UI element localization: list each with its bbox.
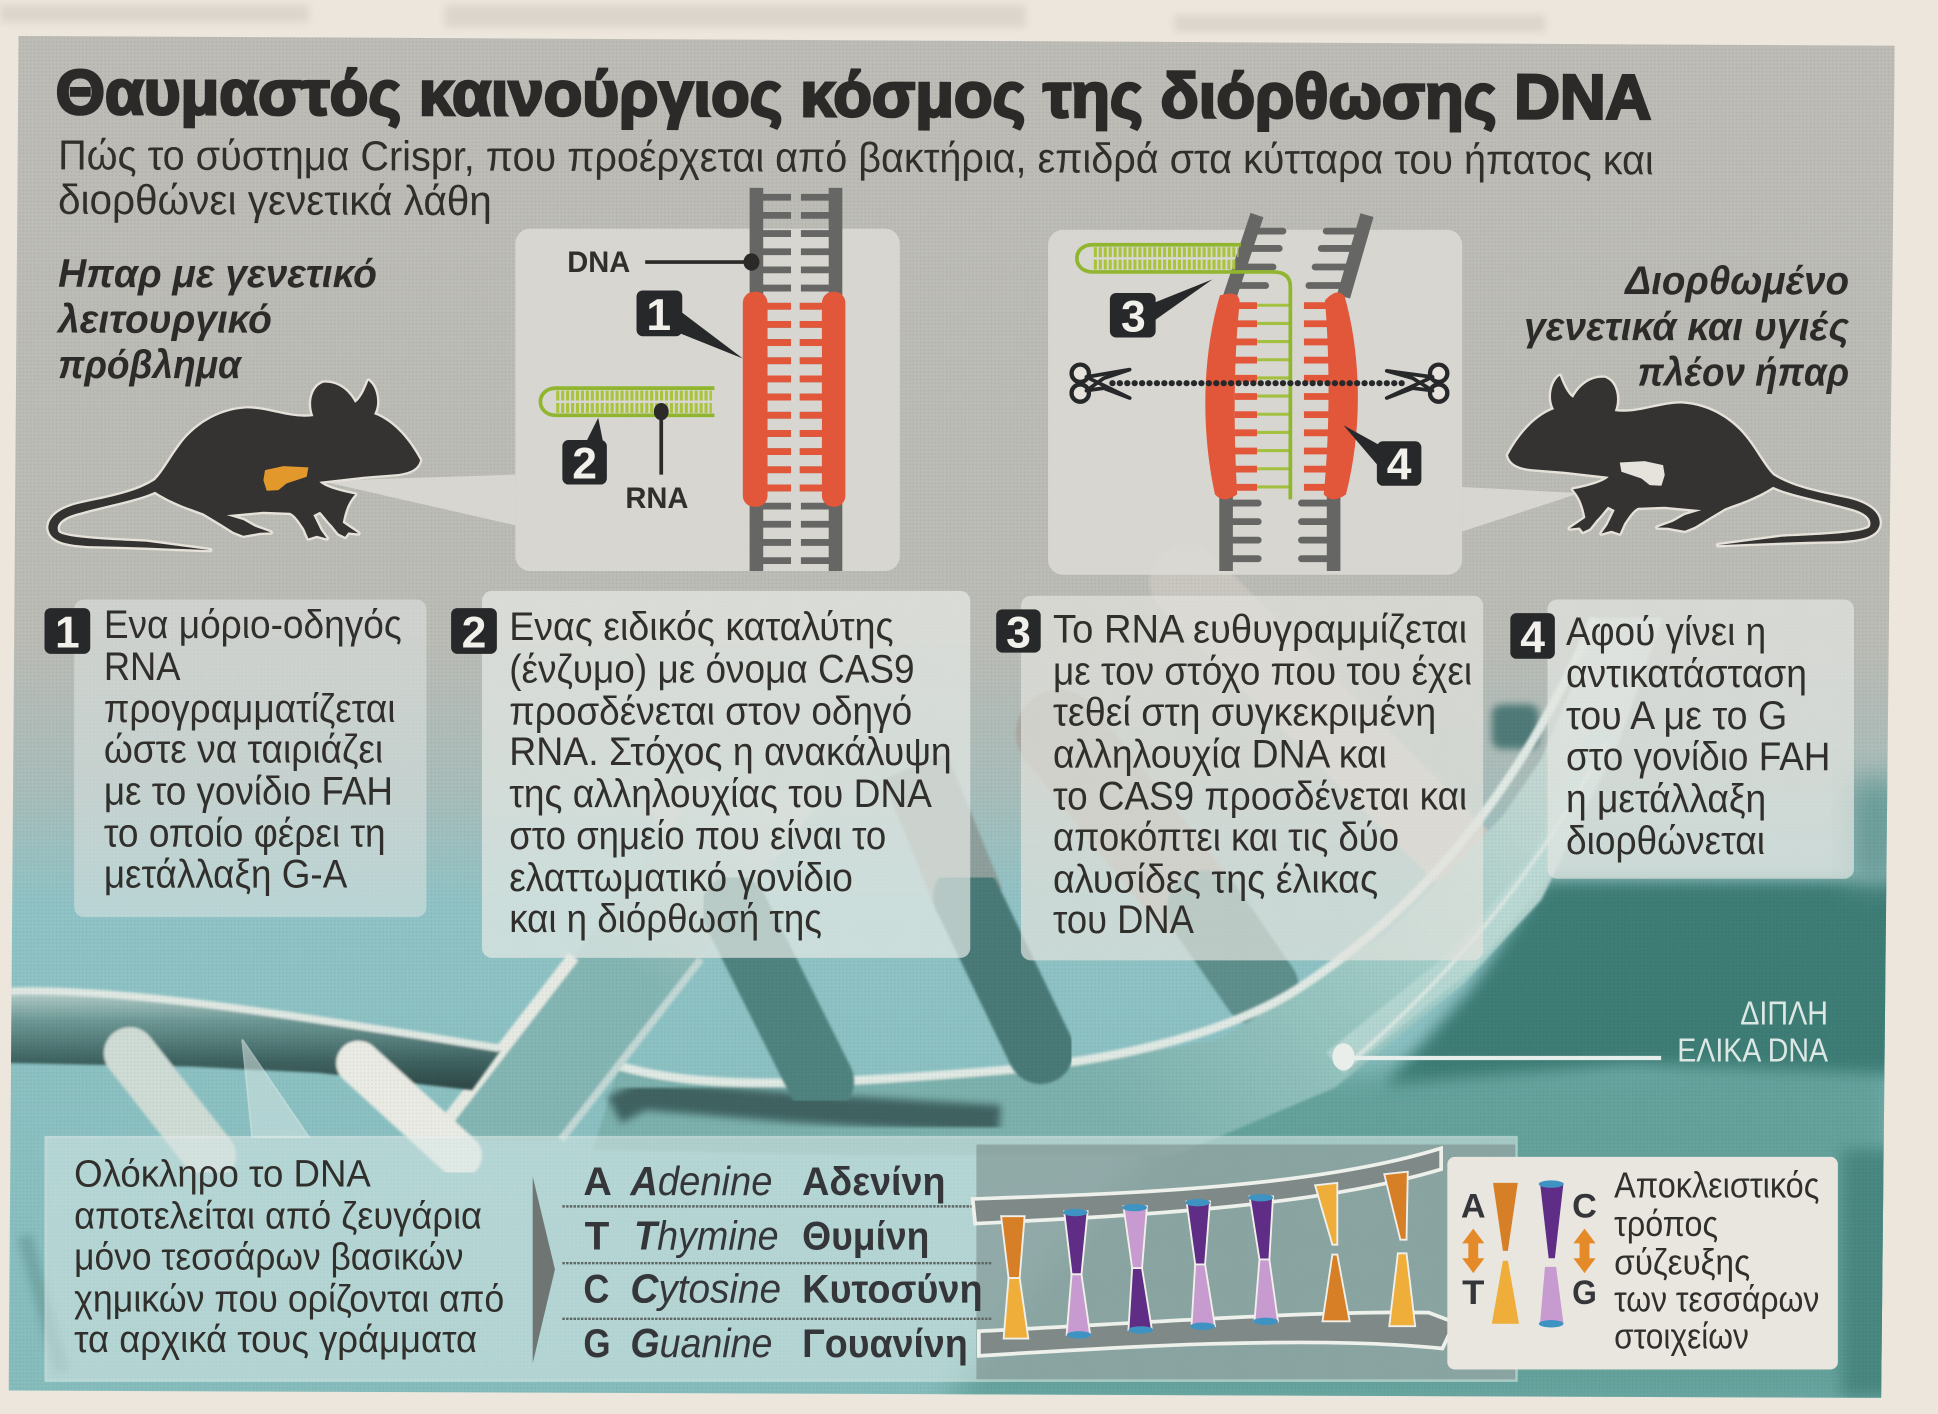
- step 2 text: της αλληλουχίας του DNA: [509, 772, 933, 816]
- pair A-T: [1461, 1183, 1519, 1324]
- row T: T: [585, 1215, 609, 1259]
- step 1 text: RNA: [104, 645, 181, 689]
- badge 4: 4: [1387, 441, 1412, 490]
- rods behind ribbon: [677, 581, 1458, 989]
- label: corrected healthy liver: γενετικά και υγιές: [1524, 305, 1849, 349]
- label: corrected healthy liver: Διορθωμένο: [1623, 259, 1849, 303]
- text: whole DNA explanation: [74, 1153, 504, 1361]
- callout: double helix: ΔΙΠΛΗ: [1740, 996, 1828, 1033]
- icon: mouse with defective liver: [48, 381, 420, 550]
- step 4: [1510, 610, 1830, 863]
- pointer: right mouse to inset: [1462, 487, 1580, 531]
- table: four bases: [562, 1158, 991, 1366]
- badge 2 small: 2: [462, 609, 486, 658]
- subtitle: [58, 131, 1654, 228]
- pair C-G: C: [1572, 1187, 1597, 1225]
- rod C: [444, 838, 720, 1142]
- step 4 text: του Α με το G: [1566, 694, 1787, 738]
- legend text: των τεσσάρων: [1614, 1279, 1819, 1319]
- step 3 text: αλληλουχία DNA και: [1053, 733, 1387, 777]
- row T: [585, 1213, 929, 1259]
- panel: bottom: [46, 1137, 1517, 1381]
- cut line with scissors: [1072, 365, 1447, 402]
- step 1 text: το οποίο φέρει τη: [104, 812, 386, 856]
- diagram: cut DNA helix with guide: [1077, 215, 1367, 571]
- step 3 text: [1053, 608, 1472, 942]
- step 1: [44, 603, 402, 896]
- step 2 text: και η διόρθωσή της: [509, 897, 822, 941]
- subtitle: διορθώνει γενετικά λάθη: [58, 176, 492, 224]
- panel: step 1 box: [74, 599, 426, 917]
- pair A-T: A: [1461, 1187, 1486, 1225]
- callout: double helix: ΕΛΙΚΑ DNA: [1677, 1033, 1829, 1070]
- base caps: [1063, 1194, 1278, 1339]
- title: Θαυμαστός καινούργιος κόσμος της διόρθωσης DNA: [56, 58, 1651, 133]
- icon: mouse with corrected liver: [1508, 376, 1880, 545]
- row G: Γουανίνη: [802, 1322, 968, 1366]
- badge 2 small: [451, 608, 497, 658]
- panel: step 2 box: [482, 591, 970, 958]
- row A: Adenine: [629, 1158, 772, 1204]
- pair A-T: T: [1462, 1274, 1484, 1312]
- step 2 text: ελαττωματικό γονίδιο: [509, 856, 853, 900]
- step 2 text: (ένζυμο) με όνομα CAS9: [509, 647, 915, 691]
- badge 1: [637, 290, 743, 358]
- step 4 text: στο γονίδιο FAH: [1566, 735, 1830, 779]
- base pairs: [1001, 1172, 1415, 1339]
- legend text: Αποκλειστικός: [1614, 1166, 1819, 1206]
- icon: orange liver: [263, 466, 308, 491]
- panel: inset left: [515, 229, 900, 571]
- row G: [583, 1320, 968, 1366]
- badge 4 small: [1510, 613, 1555, 663]
- step 3 text: με τον στόχο που του έχει: [1053, 650, 1472, 694]
- step 3 text: αποκόπτει και τις δύο: [1053, 815, 1399, 859]
- pair C-G: G: [1572, 1274, 1597, 1312]
- badge 2: 2: [572, 439, 597, 488]
- guide hairpin and strand: [1077, 245, 1290, 499]
- step 3: [996, 608, 1472, 942]
- badge 4 small: 4: [1520, 614, 1545, 663]
- badge 3: 3: [1121, 292, 1146, 341]
- legend text: στοιχείων: [1614, 1316, 1749, 1356]
- label: liver with functional genetic problem: πρόβλημα: [58, 343, 242, 387]
- step 3 text: Το RNA ευθυγραμμίζεται: [1053, 608, 1467, 652]
- badge 1: 1: [646, 291, 671, 340]
- icon: right scissors: [1387, 365, 1447, 402]
- subtitle: Πώς το σύστημα Crispr, που προέρχεται από βακτήρια, επιδρά στα κύτταρα του ήπατος και: [58, 131, 1654, 183]
- text: whole DNA explanation: Ολόκληρο το DNA: [74, 1153, 371, 1196]
- row T: Θυμίνη: [802, 1215, 929, 1259]
- badge 4: [1343, 425, 1421, 490]
- text: whole DNA explanation: μόνο τεσσάρων βασικών: [74, 1235, 463, 1278]
- label: corrected healthy liver: πλέον ήπαρ: [1638, 351, 1849, 395]
- top strand: [973, 1148, 1441, 1224]
- rungs: [1226, 231, 1362, 559]
- row G: Guanine: [630, 1320, 772, 1366]
- step 3 text: του DNA: [1053, 898, 1195, 942]
- step 1 text: ώστε να ταιριάζει: [104, 728, 383, 772]
- step 4 text: [1566, 610, 1830, 863]
- panel: pairing legend: [1447, 1157, 1838, 1369]
- badge 3 small: 3: [1006, 609, 1031, 658]
- row A: Αδενίνη: [802, 1160, 946, 1204]
- row C: Cytosine: [630, 1266, 781, 1312]
- badge 3: [1110, 279, 1212, 341]
- badge 3 small: [996, 609, 1041, 658]
- step 4 text: διορθώνεται: [1566, 819, 1765, 863]
- text: whole DNA explanation: τα αρχικά τους γράμματα: [74, 1318, 477, 1361]
- step 2 text: προσδένεται στον οδηγό: [509, 689, 912, 733]
- step 1 text: μετάλλαξη G-A: [104, 852, 348, 896]
- step 1 text: με το γονίδιο FAH: [104, 770, 393, 814]
- row C: [583, 1266, 983, 1312]
- text: whole DNA explanation: χημικών που ορίζονται από: [74, 1277, 504, 1320]
- left ribbon: [6, 990, 501, 1156]
- step 4 text: Αφού γίνει η: [1566, 610, 1766, 654]
- legend text: τρόπος: [1614, 1204, 1718, 1244]
- step 3 text: το CAS9 προσδένεται και: [1053, 775, 1467, 819]
- green rungs: [1257, 304, 1287, 489]
- step 3 text: αλυσίδες της έλικας: [1053, 857, 1378, 901]
- step 1 text: [104, 603, 402, 896]
- dark teal right area: [1384, 880, 1928, 1085]
- diagram: DNA helix with highlighted target: [743, 188, 845, 571]
- bottom strand: [979, 1312, 1455, 1356]
- label: liver with functional genetic problem: Ηπαρ με γενετικό: [58, 252, 377, 296]
- badge 1 small: [44, 608, 90, 658]
- row C: Κυτοσύνη: [802, 1268, 983, 1312]
- step 2 text: στο σημείο που είναι το: [509, 814, 886, 858]
- big ribbon: [593, 618, 1662, 1156]
- row A: A: [583, 1160, 612, 1204]
- step 1 text: προγραμματίζεται: [104, 687, 396, 731]
- step 2 text: [509, 605, 952, 941]
- icon: healed liver: [1620, 461, 1665, 486]
- label: DNA: [567, 246, 760, 279]
- ladder backdrop: [976, 1145, 1515, 1379]
- label: DNA: DNA: [567, 246, 630, 279]
- row T: Thymine: [634, 1213, 779, 1259]
- pair C-G: [1539, 1180, 1597, 1327]
- row G: G: [583, 1322, 611, 1366]
- step 4 text: η μετάλλαξη: [1566, 777, 1766, 821]
- panel: step 3 box: [1021, 596, 1483, 960]
- step 3 text: τεθεί στη συγκεκριμένη: [1053, 691, 1436, 735]
- lower right teal: [939, 1051, 1897, 1409]
- text: whole DNA explanation: αποτελείται από ζευγάρια: [74, 1195, 482, 1238]
- step 2: [451, 605, 952, 941]
- label: liver with functional genetic problem: λειτουργικό: [56, 298, 272, 342]
- label: liver with functional genetic problem: [56, 252, 377, 387]
- row A: [583, 1158, 946, 1204]
- callout: double helix: [1332, 996, 1829, 1070]
- strands: [1226, 215, 1257, 571]
- step 1 text: Ενα μόριο-οδηγός: [104, 603, 402, 647]
- target section: [743, 292, 845, 507]
- label: RNA: RNA: [625, 482, 688, 515]
- step 4 text: αντικατάσταση: [1566, 652, 1807, 696]
- step 2 text: RNA. Στόχος η ανακάλυψη: [509, 730, 952, 774]
- row C: C: [583, 1268, 609, 1312]
- label: RNA: [625, 403, 688, 515]
- pointer: left mouse to inset: [320, 475, 515, 525]
- arrow separator: [533, 1177, 555, 1363]
- icon: left scissors: [1072, 365, 1130, 402]
- red bands: [1205, 293, 1240, 499]
- label: corrected healthy liver: [1524, 259, 1849, 395]
- legend text: σύζευξης: [1614, 1242, 1750, 1282]
- badge 2: [562, 418, 607, 488]
- panel: step 4 box: [1547, 599, 1854, 879]
- legend text: [1614, 1166, 1819, 1356]
- badge 1 small: 1: [55, 609, 80, 658]
- panel: inset right: [1048, 230, 1462, 575]
- pointer: to DNA strand: [242, 1039, 309, 1137]
- rods in front: [734, 896, 1041, 1081]
- chart: DNA ladder: [973, 1148, 1455, 1356]
- icon: RNA hairpin: [540, 388, 714, 415]
- step 2 text: Ενας ειδικός καταλύτης: [509, 605, 894, 649]
